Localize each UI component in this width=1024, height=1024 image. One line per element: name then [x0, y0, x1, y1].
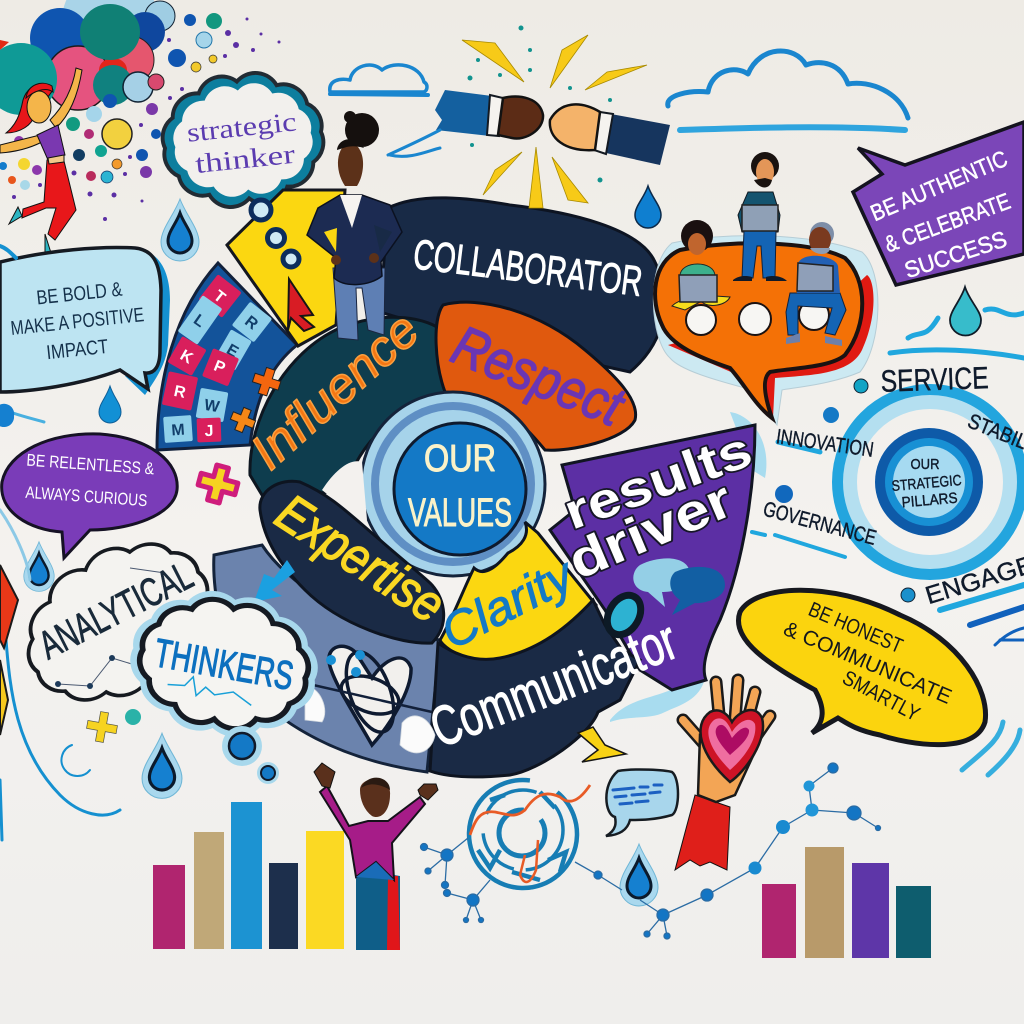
speech bubble: be bold: MAKE A POSITIVE [10, 304, 145, 340]
strategic pillars diagram: GOVERNANCE [761, 498, 879, 550]
figure: jumping woman [0, 68, 82, 256]
strategic pillars diagram: PILLARS [901, 490, 958, 511]
icon: chat bubbles [633, 558, 725, 615]
speech bubble: be relentless [2, 434, 177, 558]
water drops [24, 186, 981, 906]
panel: respect: Respect [444, 313, 634, 439]
network of nodes [420, 763, 880, 939]
speech bubble: be honest: BE HONEST [805, 598, 906, 658]
cloud bubble: strategic thinker: strategic [185, 106, 298, 148]
speech bubble: be honest [738, 590, 986, 745]
bar chart right [762, 847, 931, 958]
figure: left person with laptop [672, 220, 730, 310]
speech bubble: be bold: BE BOLD & [35, 279, 124, 309]
panel: collaborator: COLLABORATOR [411, 230, 645, 305]
yellow burst rays [462, 35, 647, 208]
cloud bubble: strategic thinker: thinker [194, 139, 296, 179]
center ring and our values [322, 392, 545, 576]
panel: results driver: driver [560, 470, 741, 591]
bar chart left [153, 802, 344, 949]
fist bump [435, 35, 670, 208]
speech bubble: be authentic [853, 122, 1024, 285]
clouds and blue swooshes, top [330, 51, 908, 156]
blue fan with tiles: R [241, 313, 261, 334]
thought dots [85, 709, 279, 784]
figure: seated man with laptop [786, 222, 846, 346]
icon: hand holding heart [675, 680, 770, 870]
balloons and confetti [0, 0, 280, 221]
panel: communicator: Communicator [422, 608, 685, 759]
panel: collaborator [380, 198, 665, 372]
slate panel [214, 545, 440, 772]
panel: communicator [422, 589, 685, 777]
strategic pillars diagram: STRATEGIC [891, 472, 962, 495]
light blue wave under purple panel [610, 678, 705, 722]
center ring and our values: OUR [424, 438, 496, 480]
blue fan with tiles: R [172, 383, 188, 402]
center ring and our values: VALUES [408, 491, 512, 535]
panel: results driver: results [557, 421, 759, 540]
icon: atom heart [326, 646, 411, 745]
figure: standing woman [307, 111, 402, 340]
speech bubble: be relentless: BE RELENTLESS & [26, 451, 155, 478]
panel: clarity: Clarity [433, 548, 584, 660]
figure: standing man with laptop [733, 152, 787, 281]
panel: expertise: Expertise [265, 483, 455, 634]
cloud bubble: analytical [0, 513, 236, 731]
strategic pillars diagram: SERVICE [880, 360, 989, 399]
speech bubble: be relentless: ALWAYS CURIOUS [25, 483, 148, 510]
panel: orange speech bubble with team [653, 152, 878, 425]
panel: results driver [550, 412, 766, 690]
yellow pentagon with dots and arrow [227, 190, 345, 346]
speech bubble: be bold [0, 248, 170, 395]
left arm [435, 90, 492, 136]
blue fan with tiles [157, 263, 297, 450]
sparkle dots [468, 26, 612, 182]
icon: orange plus marks [227, 365, 284, 436]
blue fan with tiles: J [204, 423, 214, 440]
speech bubble: be authentic: SUCCESS [901, 226, 1010, 283]
cloud bubble: thinkers: THINKERS [151, 631, 297, 699]
icon: yellow plus pink [195, 462, 241, 506]
blue fan with tiles: P [211, 358, 228, 377]
strategic pillars diagram [761, 360, 1024, 610]
strategic pillars diagram: OUR [910, 456, 940, 473]
speech bubble: be honest: SMARTLY [839, 666, 924, 726]
right arm [600, 112, 670, 165]
speech bubble: be honest: & COMMUNICATE [780, 617, 955, 709]
blue fan with tiles: M [171, 422, 185, 439]
blue fan with tiles: T [210, 287, 228, 307]
cloud bubble: analytical: ANALYTICAL [32, 553, 200, 668]
speech bubble: be bold: IMPACT [45, 336, 109, 364]
cloud bubble: strategic thinker [157, 67, 329, 213]
blue fan with tiles: E [223, 341, 241, 361]
figure: person with raised arms [314, 763, 438, 950]
panel: influence: Influence [240, 301, 430, 480]
panel divider band [300, 682, 432, 712]
blue fan with tiles: K [177, 347, 196, 368]
strategic pillars diagram: INNOVATION [775, 425, 875, 462]
blue fan with tiles: W [203, 397, 222, 416]
white shaking hands [305, 686, 435, 753]
accent blue strokes, left [0, 246, 120, 840]
cloud bubble: thinkers [126, 584, 322, 744]
icon: small chat bubble [606, 769, 678, 836]
left edge flame [0, 565, 18, 735]
icon: blue arrow [254, 560, 295, 602]
icon: maze [454, 765, 592, 903]
icon: yellow arrow [578, 727, 626, 762]
teal wave strokes [752, 309, 1024, 775]
blue fan with tiles: L [190, 311, 208, 331]
